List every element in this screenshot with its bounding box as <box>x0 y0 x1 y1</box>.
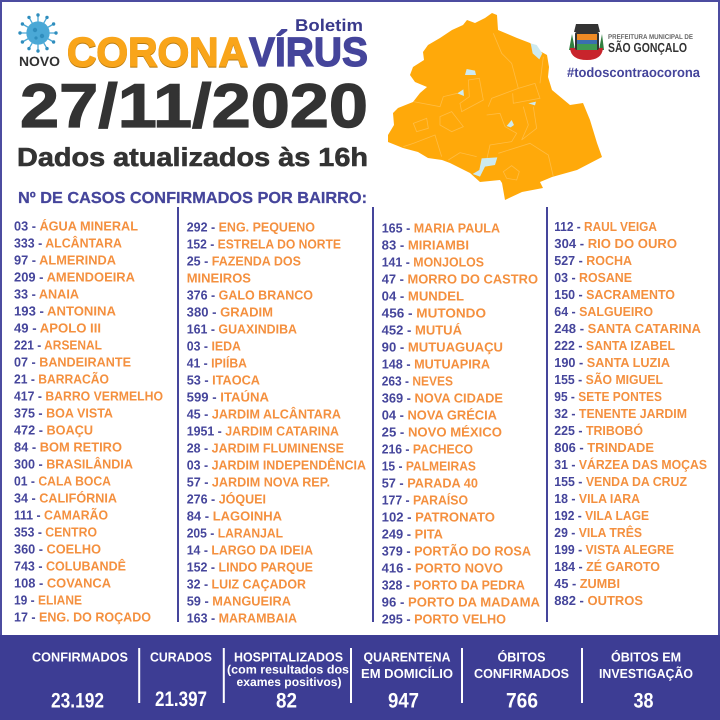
list column 1: 333 - ALCÂNTARA <box>14 236 123 251</box>
list column 4: 155 - SÃO MIGUEL <box>554 372 663 387</box>
list column 1: 221 - ARSENAL <box>14 338 102 353</box>
list column 4: 225 - TRIBOBÓ <box>554 423 643 438</box>
list column 3: 90 - MUTUAGUAÇU <box>382 340 503 355</box>
list column 1: 111 - CAMARÃO <box>14 508 108 523</box>
icon: virus <box>18 13 58 53</box>
title: virus: VÍRUS <box>249 29 368 75</box>
list column 4: 806 - TRINDADE <box>554 440 654 455</box>
list column 4: 248 - SANTA CATARINA <box>554 321 702 336</box>
list column 4: 222 - SANTA IZABEL <box>554 338 675 353</box>
list column 1: 07 - BANDEIRANTE <box>14 355 131 370</box>
list column 2: 32 - LUIZ CAÇADOR <box>187 576 307 592</box>
stat: obitos confirmados: CONFIRMADOS <box>474 666 569 681</box>
list column 1: 193 - ANTONINA <box>14 304 117 319</box>
list column 2 <box>187 220 367 626</box>
list column 3: 295 - PORTO VELHO <box>382 612 506 627</box>
list column 1: 84 - BOM RETIRO <box>14 440 122 455</box>
list column 3: 25 - NOVO MÉXICO <box>382 425 502 440</box>
stat: confirmados: CONFIRMADOS <box>32 650 128 664</box>
list column 2: 41 - IPIÍBA <box>187 356 248 370</box>
list column 2: 152 - LINDO PARQUE <box>187 560 313 574</box>
list column 3: 165 - MARIA PAULA <box>382 221 501 236</box>
list column 2: 25 - FAZENDA DOS <box>187 254 301 268</box>
list column 3: 263 - NEVES <box>382 374 453 389</box>
list column 3: 83 - MIRIAMBI <box>382 238 469 253</box>
list column 3: 216 - PACHECO <box>382 442 473 457</box>
list column 2: 161 - GUAXINDIBA <box>187 322 298 336</box>
map: São Gonçalo neighbourhoods <box>388 13 602 200</box>
list column 1: 353 - CENTRO <box>14 525 97 540</box>
list column 4: 184 - ZÉ GAROTO <box>554 559 660 574</box>
stat: curados <box>150 650 212 711</box>
list column 3: 456 - MUTONDO <box>382 306 486 321</box>
list column 1: 360 - COELHO <box>14 542 101 557</box>
stat: hospitalizados <box>227 650 349 712</box>
list column 1: 417 - BARRO VERMELHO <box>14 389 163 404</box>
list column 4: 03 - ROSANE <box>554 270 632 285</box>
list column 4: 64 - SALGUEIRO <box>554 304 653 319</box>
stat: quarentena: EM DOMICÍLIO <box>361 666 453 681</box>
list column 4: 199 - VISTA ALEGRE <box>554 542 674 557</box>
list column 3: 102 - PATRONATO <box>382 510 495 525</box>
list column 3 <box>382 221 541 627</box>
stat: obitos confirmados: ÓBITOS <box>498 650 546 664</box>
list column 2: 292 - ENG. PEQUENO <box>187 220 315 234</box>
stat: obitos em investigacao <box>599 650 693 712</box>
list column 3: 57 - PARADA 40 <box>382 476 478 491</box>
list column 3: 328 - PORTO DA PEDRA <box>382 578 526 593</box>
list column 4: 192 - VILA LAGE <box>554 508 649 523</box>
list column 1: 33 - ANAIA <box>14 287 80 302</box>
divider: columns 3-4 <box>546 207 548 622</box>
list column 1: 01 - CALA BOCA <box>14 474 112 489</box>
list column 3: 96 - PORTO DA MADAMA <box>382 595 541 610</box>
list column 4: 190 - SANTA LUZIA <box>554 355 671 370</box>
list column 3: 416 - PORTO NOVO <box>382 561 503 576</box>
date: 27/11/2020 <box>20 72 368 141</box>
stat: obitos em investigacao: ÓBITOS EM <box>611 650 681 664</box>
list column 1: 108 - COVANCA <box>14 576 112 591</box>
label: boletim: Boletim <box>295 16 363 35</box>
list column 2: 152 - ESTRELA DO NORTE <box>187 236 341 252</box>
list column 4: 95 - SETE PONTES <box>554 389 662 404</box>
list column 1: 21 - BARRACÃO <box>14 372 109 387</box>
list column 4: 31 - VÁRZEA DAS MOÇAS <box>554 457 707 472</box>
list column 2: 53 - ITAOCA <box>187 372 261 388</box>
list column 3: 04 - NOVA GRÉCIA <box>382 408 498 423</box>
list column 4: 155 - VENDA DA CRUZ <box>554 474 687 489</box>
stat: curados: CURADOS <box>150 650 212 664</box>
heading: cases by neighbourhood: Nº DE CASOS CONFIRMADOS POR BAIRRO: <box>18 190 367 207</box>
list column 2: 380 - GRADIM <box>187 304 273 320</box>
list column 4: 32 - TENENTE JARDIM <box>554 406 687 421</box>
stat: hospitalizados: 82 <box>276 690 297 712</box>
hashtag: #todoscontraocorona <box>567 65 700 80</box>
list column 1: 34 - CALIFÓRNIA <box>14 491 118 506</box>
list column 2: 1951 - JARDIM CATARINA <box>187 424 340 438</box>
list column 2: 45 - JARDIM ALCÂNTARA <box>187 406 342 422</box>
title: corona: CORONA <box>67 29 248 75</box>
stat: curados: 21.397 <box>155 688 207 711</box>
list column 2: 28 - JARDIM FLUMINENSE <box>187 440 344 456</box>
list column 2: 03 - JARDIM INDEPENDÊNCIA <box>187 458 367 472</box>
list column 3: 15 - PALMEIRAS <box>382 459 476 474</box>
stat: obitos em investigacao: 38 <box>634 690 654 712</box>
list column 2: 599 - ITAÚNA <box>187 390 270 404</box>
stat: hospitalizados: HOSPITALIZADOS <box>234 650 343 664</box>
list column 1: 209 - AMENDOEIRA <box>14 270 136 285</box>
stat: quarentena: 947 <box>388 690 419 712</box>
stat: obitos confirmados: 766 <box>506 690 538 712</box>
list column 3: 452 - MUTUÁ <box>382 323 463 338</box>
list column 4: 882 - OUTROS <box>554 593 643 608</box>
list column 3: 04 - MUNDEL <box>382 289 464 304</box>
list column 1: 49 - APOLO III <box>14 321 101 336</box>
list column 4: 527 - ROCHA <box>554 253 633 268</box>
list column 2: 376 - GALO BRANCO <box>187 288 313 302</box>
list column 1: 17 - ENG. DO ROÇADO <box>14 610 151 625</box>
list column 1: 743 - COLUBANDÊ <box>14 559 126 574</box>
list column 3: 249 - PITA <box>382 527 444 542</box>
list column 2: 205 - LARANJAL <box>187 526 283 540</box>
list column 1: 03 - ÁGUA MINERAL <box>14 219 138 234</box>
list column 3: 47 - MORRO DO CASTRO <box>382 272 538 287</box>
list column 3: 177 - PARAÍSO <box>382 493 468 508</box>
text: são gonçalo: SÃO GONÇALO <box>608 40 687 55</box>
list column 4: 45 - ZUMBI <box>554 576 620 591</box>
stat: quarentena: QUARENTENA <box>364 650 451 664</box>
text: prefeitura municipal de: PREFEITURA MUNICIPAL DE <box>608 34 693 41</box>
stat: quarentena <box>361 650 453 712</box>
list column 4 <box>554 219 707 608</box>
list column 2: 276 - JÓQUEI <box>187 492 266 506</box>
list column 1: 19 - ELIANE <box>14 593 82 608</box>
divider: columns 1-2 <box>177 207 179 622</box>
list column 4: 18 - VILA IARA <box>554 491 641 506</box>
list column 4: 304 - RIO DO OURO <box>554 236 677 251</box>
stat: confirmados: 23.192 <box>51 690 104 712</box>
list column 3: 379 - PORTÃO DO ROSA <box>382 544 532 559</box>
list column 4: 112 - RAUL VEIGA <box>554 219 658 234</box>
icon: crest <box>569 24 604 60</box>
list column 3: 148 - MUTUAPIRA <box>382 357 491 372</box>
stat: obitos confirmados <box>474 650 569 712</box>
list column 4: 150 - SACRAMENTO <box>554 287 675 302</box>
list column 1: 375 - BOA VISTA <box>14 406 114 421</box>
logo: Prefeitura de São Gonçalo <box>567 24 700 80</box>
divider: columns 2-3 <box>372 207 374 622</box>
stat: hospitalizados: (com resultados dos <box>227 662 349 676</box>
label: novo: NOVO <box>19 54 60 69</box>
list column 3: 369 - NOVA CIDADE <box>382 391 503 406</box>
stat: obitos em investigacao: INVESTIGAÇÃO <box>599 666 693 681</box>
list column 2: 163 - MARAMBAIA <box>187 610 298 626</box>
list column 2: MINEIROS <box>187 270 251 286</box>
list column 4: 29 - VILA TRÊS <box>554 525 642 540</box>
list column 1: 97 - ALMERINDA <box>14 253 117 268</box>
list column 2: 84 - LAGOINHA <box>187 508 283 524</box>
list column 2: 14 - LARGO DA IDEIA <box>187 542 314 558</box>
list column 2: 03 - IEDA <box>187 338 242 354</box>
stat: confirmados <box>32 650 128 712</box>
list column 3: 141 - MONJOLOS <box>382 255 484 270</box>
list column 2: 59 - MANGUEIRA <box>187 594 292 608</box>
list column 2: 57 - JARDIM NOVA REP. <box>187 474 330 490</box>
header: title block <box>17 13 368 207</box>
list column 1: 300 - BRASILÂNDIA <box>14 457 134 472</box>
list column 1: 472 - BOAÇU <box>14 423 93 438</box>
stat: hospitalizados: exames positivos) <box>236 675 342 689</box>
subtitle: update time: Dados atualizados às 16h <box>17 142 368 172</box>
list column 1 <box>14 219 163 625</box>
